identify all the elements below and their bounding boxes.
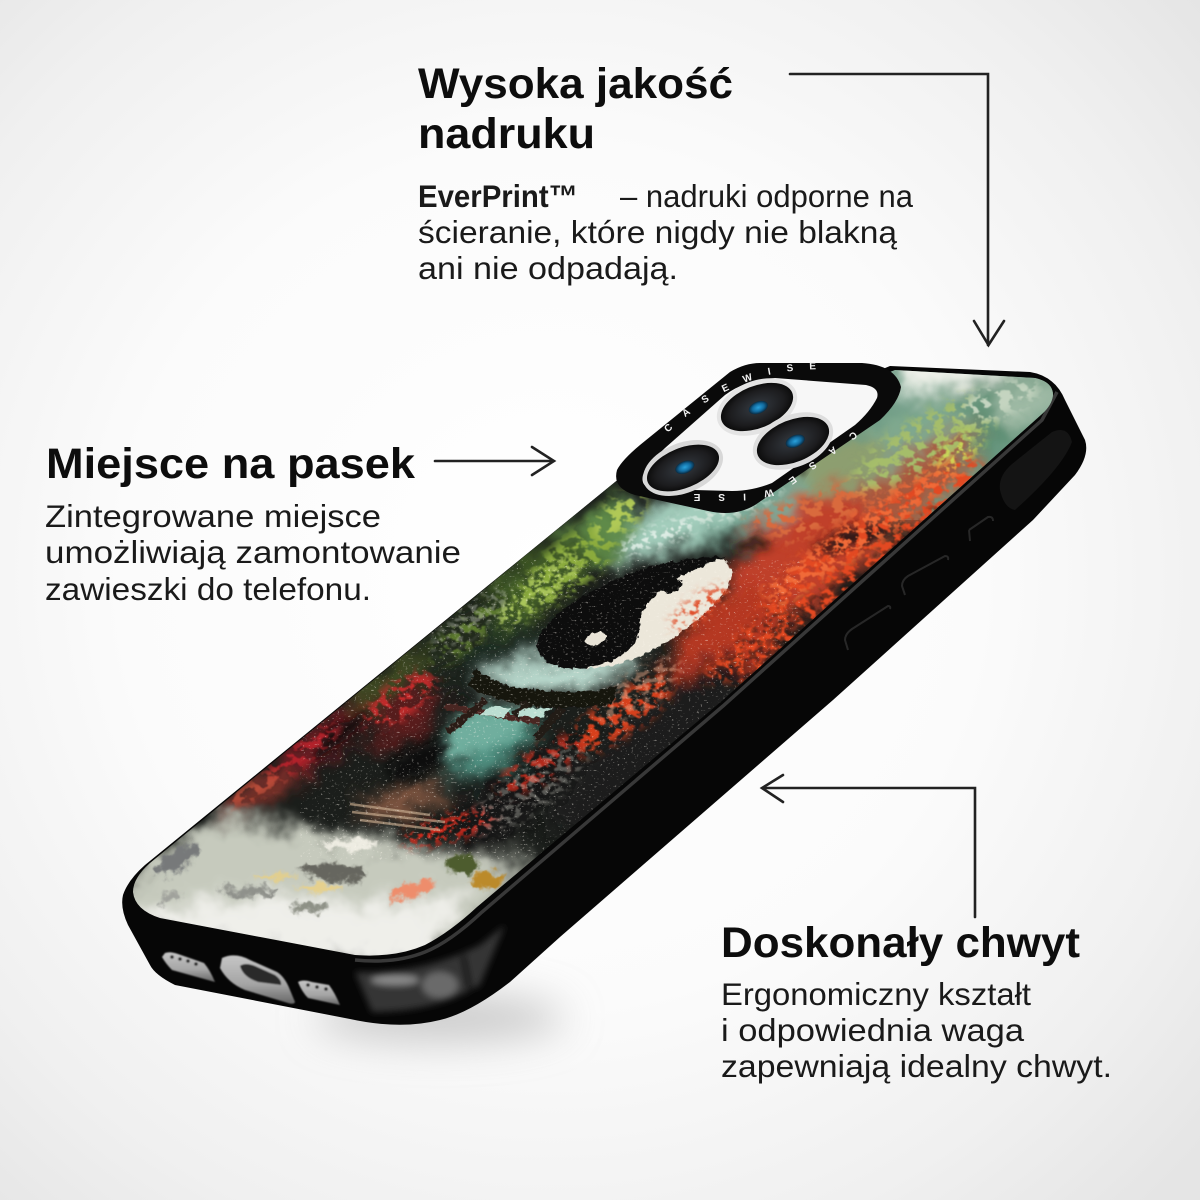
heading: strap mount: Miejsce na pasek bbox=[46, 440, 415, 488]
lens 3 bbox=[635, 429, 731, 507]
speaker grille right bbox=[298, 980, 340, 1005]
case body bbox=[122, 366, 1086, 1025]
text block: strap mount: Zintegrowane miejsce bbox=[45, 498, 381, 534]
text block: grip: i odpowiednia waga bbox=[721, 1012, 1025, 1048]
heading: print quality: nadruku bbox=[418, 110, 595, 158]
strap slot bbox=[1000, 430, 1072, 510]
side button: small bbox=[969, 517, 993, 541]
heading: print quality bbox=[418, 60, 733, 158]
text block: strap mount bbox=[45, 498, 461, 607]
yin yang dark half bbox=[536, 556, 725, 668]
speckle texture bbox=[300, 560, 800, 860]
torii gate bbox=[445, 668, 618, 738]
soft dark smudges in the red bbox=[308, 518, 894, 790]
callout: grip bbox=[721, 919, 1112, 1084]
text block: print quality: – nadruki odporne na bbox=[620, 178, 913, 214]
heading: grip: Doskonały chwyt bbox=[721, 919, 1080, 967]
phone case bbox=[122, 366, 1086, 1025]
side button: volume up bbox=[902, 556, 948, 595]
brand text top: CASEWISE bbox=[664, 362, 816, 432]
corner highlight bbox=[355, 925, 505, 1012]
red overlap on yin yang bbox=[664, 578, 736, 638]
lens 1 bbox=[708, 367, 806, 447]
text block: print quality bbox=[418, 178, 913, 286]
text block: print quality: EverPrint™ bbox=[418, 178, 578, 214]
lens 2 bbox=[744, 401, 842, 481]
text block: print quality: ścieranie, które nigdy nie blakną bbox=[418, 214, 898, 250]
arrow: to strap mount bbox=[435, 447, 554, 475]
printed artwork bbox=[133, 370, 1053, 956]
drop shadow under phone bbox=[315, 994, 565, 1042]
camera module bbox=[616, 362, 901, 513]
charging port bbox=[220, 955, 295, 1004]
arrow: to phone side bbox=[762, 775, 975, 917]
noisy paint splats bbox=[220, 371, 1043, 812]
torii opening glow bbox=[440, 708, 540, 758]
yin yang bbox=[536, 556, 731, 668]
text block: print quality: ani nie odpadają. bbox=[418, 250, 678, 286]
speaker grille left bbox=[162, 952, 215, 982]
text block: grip bbox=[721, 976, 1112, 1084]
yin yang light half bbox=[585, 558, 731, 668]
lower left strokes bbox=[149, 838, 503, 913]
camera bezel bbox=[616, 363, 901, 513]
text block: strap mount: umożliwiają zamontowanie bbox=[45, 534, 461, 570]
arrow: to top of phone bbox=[790, 74, 1004, 345]
eyes bbox=[584, 631, 608, 646]
brand text bottom: CASEWISE bbox=[694, 432, 857, 501]
steps bbox=[350, 804, 445, 830]
top right underpaint bbox=[807, 370, 1053, 520]
text block: grip: zapewniają idealny chwyt. bbox=[721, 1048, 1112, 1084]
side button: volume down bbox=[845, 606, 890, 650]
text block: grip: Ergonomiczny kształt bbox=[721, 976, 1031, 1012]
painted base layer bbox=[133, 370, 1053, 956]
camera glass plate bbox=[642, 378, 878, 491]
heading: print quality: Wysoka jakość bbox=[418, 60, 733, 108]
text block: strap mount: zawieszki do telefonu. bbox=[45, 571, 371, 607]
rim highlight bbox=[355, 392, 1057, 961]
callout: strap mount bbox=[45, 440, 461, 607]
callout: print quality bbox=[418, 60, 913, 286]
